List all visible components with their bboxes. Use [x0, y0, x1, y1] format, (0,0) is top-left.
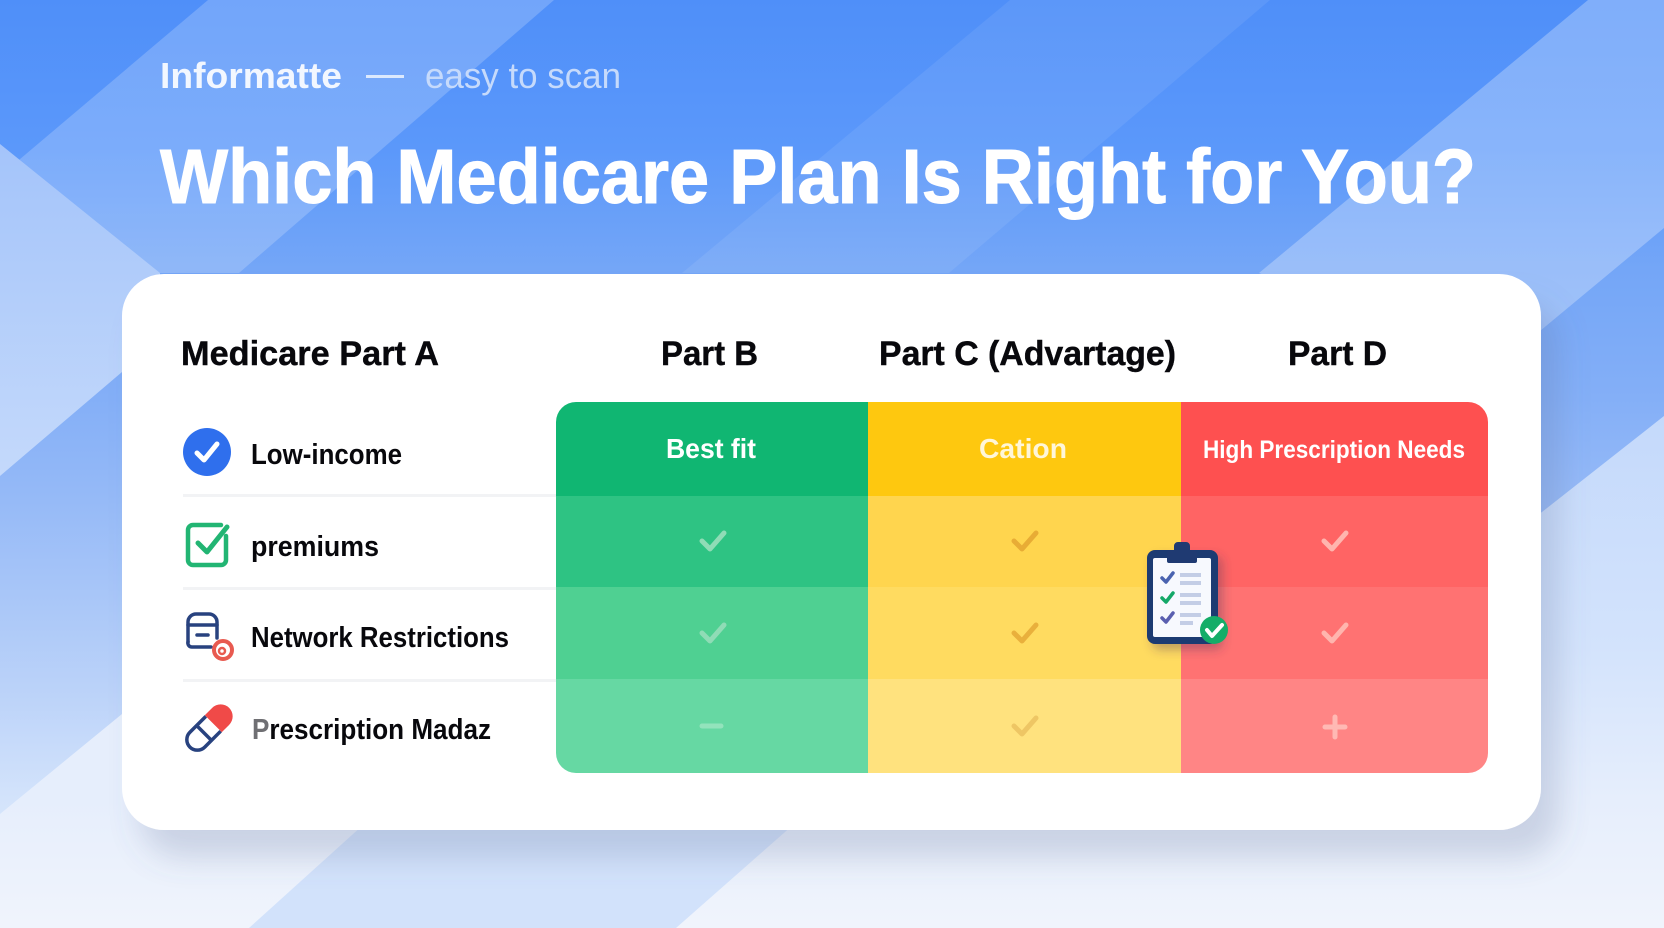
label: Cation: Cation: [979, 433, 1067, 464]
label: Best fit: Best fit: [666, 433, 756, 464]
icon: green checkbox: [188, 525, 227, 565]
title: Which Medicare Plan Is Right for You?: [160, 134, 1476, 220]
header: Part B: Part B: [661, 335, 758, 373]
icon: clipboard: [1147, 542, 1228, 644]
header: Medicare Part A: Medicare Part A: [181, 335, 439, 373]
column: yellow: [868, 402, 1181, 773]
brand line: [160, 55, 621, 96]
icon: network box: [188, 614, 232, 659]
row: Network Restrictions: [188, 614, 509, 659]
label: Low-income: Low-income: [251, 439, 402, 471]
marks: red column: [1324, 533, 1346, 737]
row: premiums: [188, 525, 379, 565]
column headers: [181, 335, 1387, 373]
row: Low-income: [183, 428, 402, 476]
marks: green column: [702, 533, 724, 726]
icon: pill: [181, 699, 238, 756]
label: High Prescription Needs: High Prescription Needs: [1203, 436, 1465, 464]
tagline: easy to scan: [425, 55, 621, 96]
column: green: [556, 402, 868, 773]
label: Network Restrictions: Network Restrictions: [251, 622, 509, 654]
column: red: [1181, 402, 1488, 773]
header: Part C: Part C (Advartage): [879, 335, 1176, 373]
table header labels: [666, 433, 1465, 464]
label: Prescription Madaz: Prescription Madaz: [252, 714, 491, 746]
header: Part D: Part D: [1288, 335, 1387, 373]
table marks: [702, 533, 1346, 737]
icon: blue check circle: [183, 428, 231, 476]
table: colour-coded plan fit: [556, 402, 1488, 773]
brand name: Informatte: [160, 55, 342, 96]
brand dash: [366, 75, 404, 78]
marks: yellow column: [1014, 533, 1036, 734]
label: premiums: premiums: [251, 531, 379, 563]
row: Prescription Madaz: [181, 699, 491, 756]
panel: comparison card: [122, 274, 1541, 830]
